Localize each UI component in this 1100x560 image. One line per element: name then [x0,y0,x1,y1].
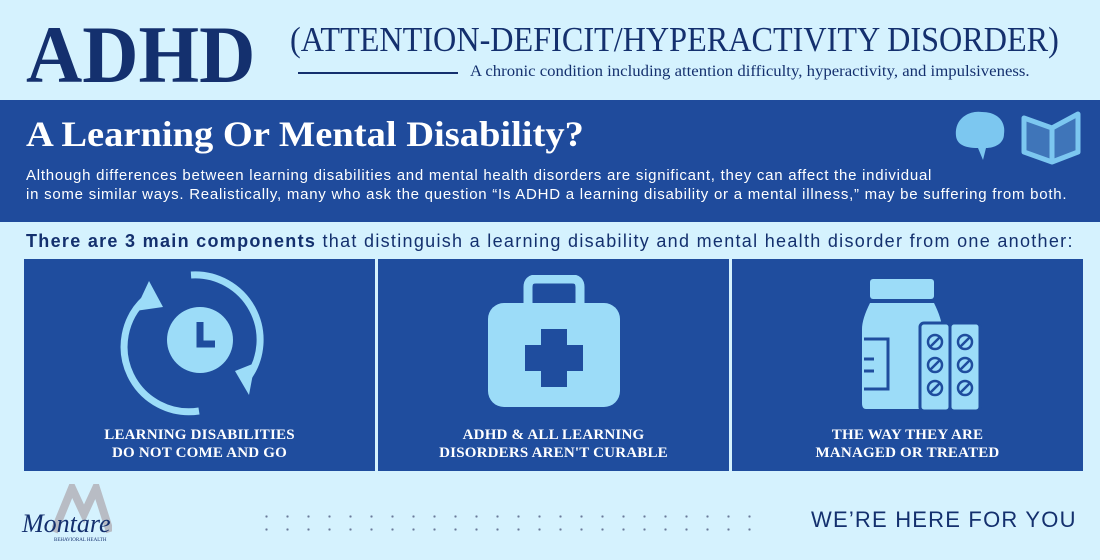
icon: clock cycle [120,271,264,416]
caption: THE WAY THEY ARE [832,427,983,443]
icon: brain and book [956,112,1080,164]
logo: BEHAVIORAL HEALTH [54,538,106,543]
logo [22,484,112,543]
dotted decoration [256,510,761,532]
intro text: in some similar ways. Realistically, many who ask the question “Is ADHD a learning disability or a mental illness,” may be suffering from both. [26,186,1067,203]
caption [816,427,999,461]
caption: DISORDERS AREN'T CURABLE [439,445,668,461]
panel: come and go [24,259,375,471]
panel: managed or treated [732,259,1083,471]
heading: A Learning Or Mental Disability? [26,114,584,154]
caption [439,427,668,461]
logo: Montare [22,509,111,538]
caption: DO NOT COME AND GO [112,445,287,461]
subtitle: (ATTENTION-DEFICIT/HYPERACTIVITY DISORDER) [290,20,1059,59]
intro text: Although differences between learning disabilities and mental health disorders are significant, they can affect the individual [26,167,932,184]
intro text [26,167,1067,203]
tagline: WE’RE HERE FOR YOU [811,507,1077,532]
caption: ADHD & ALL LEARNING [463,427,644,443]
components lead-in: There are 3 main components that distinguish a learning disability and mental health disorder from one another: [26,231,1074,251]
caption: LEARNING DISABILITIES [104,427,295,443]
definition: A chronic condition including attention difficulty, hyperactivity, and impulsiveness. [470,63,1030,80]
definition line [298,72,458,74]
panel: intro band [0,100,1100,222]
icon: pill bottle and blisters [862,279,978,410]
caption [104,427,295,461]
caption: MANAGED OR TREATED [816,445,999,461]
icon: medical kit [488,275,620,407]
title: ADHD [26,9,255,100]
panel: not curable [378,259,729,471]
